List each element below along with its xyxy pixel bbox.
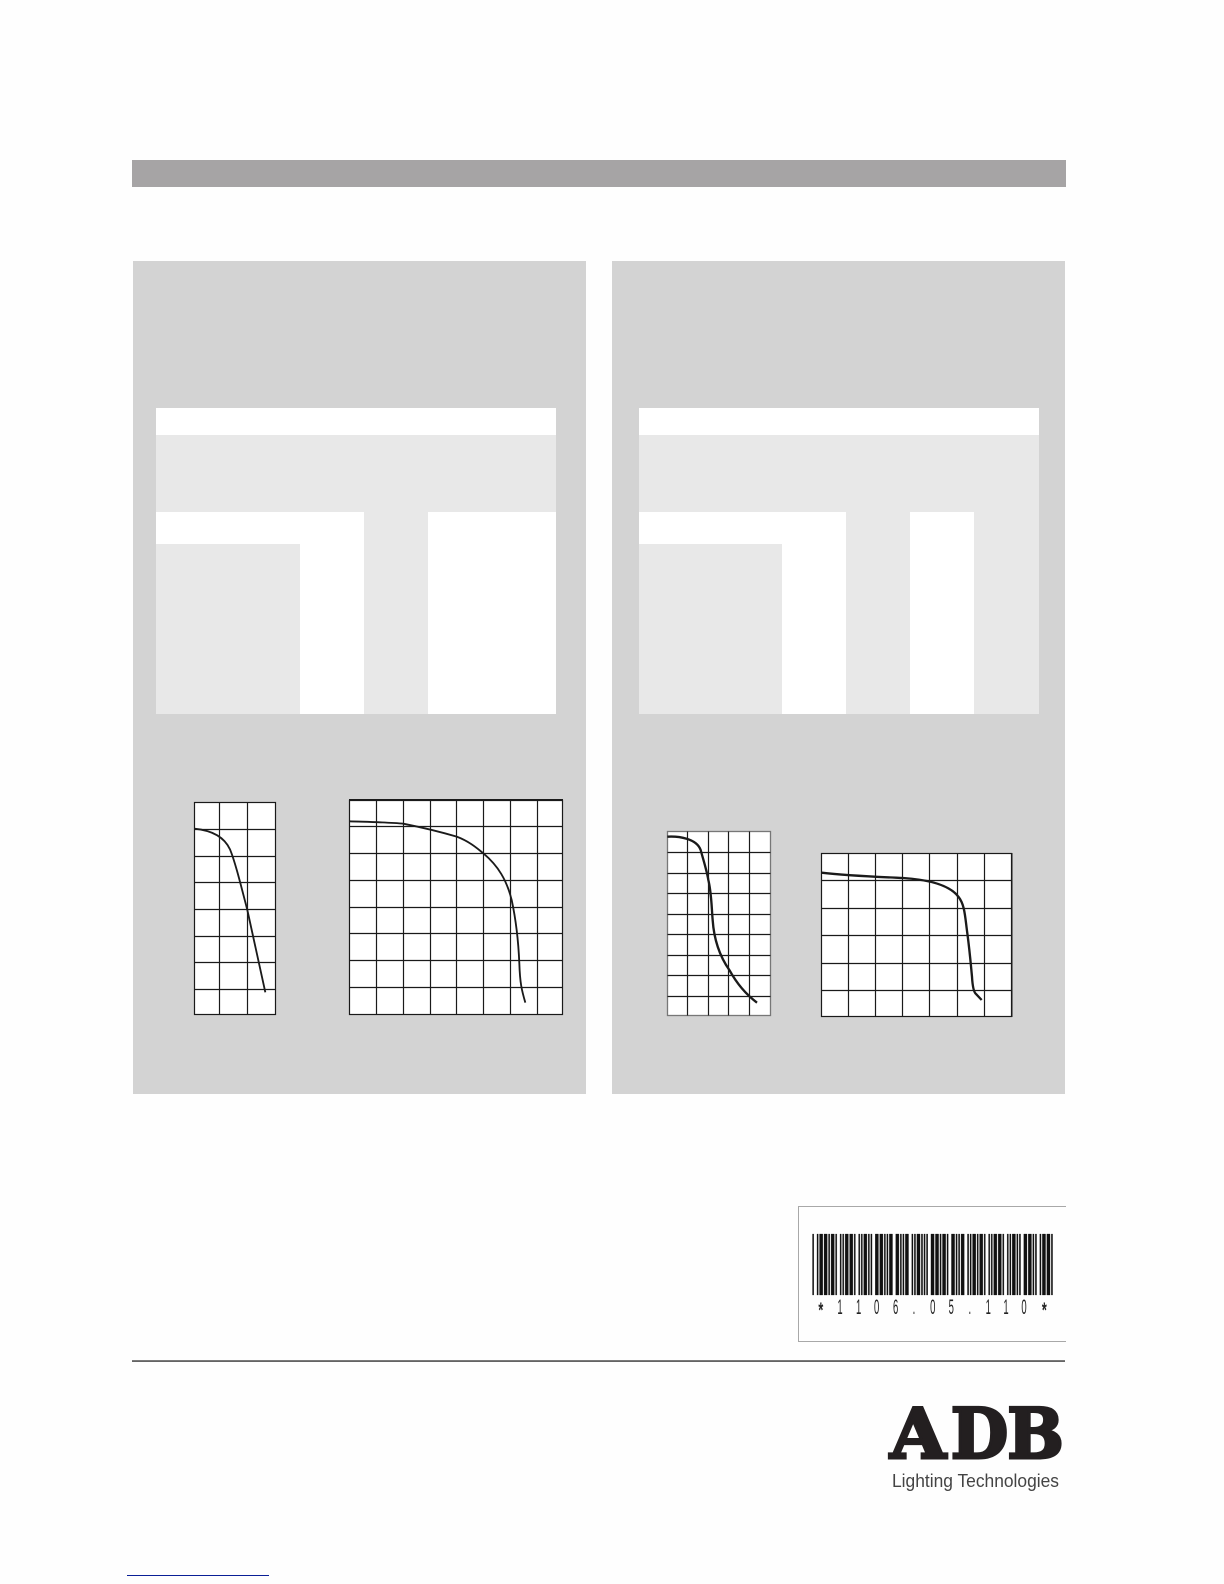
barcode bars bbox=[812, 1234, 1053, 1295]
chart: left narrow curve bbox=[194, 802, 276, 1014]
header bar bbox=[132, 160, 1066, 187]
logo tagline: Lighting Technologies bbox=[892, 1471, 1059, 1491]
chart: right narrow curve bbox=[667, 832, 770, 1016]
table: right bbox=[639, 408, 1039, 714]
chart: right wide curve bbox=[822, 853, 1012, 1017]
logo letter A: A bbox=[889, 1394, 947, 1475]
table: left bbox=[156, 408, 556, 714]
footer rule bbox=[132, 1360, 1065, 1362]
barcode number: 1106.05.110 bbox=[837, 1296, 1027, 1319]
panel: right bbox=[612, 261, 1065, 1094]
logo: ADB Lighting Technologies bbox=[889, 1393, 1064, 1491]
chart: left wide curve bbox=[349, 799, 563, 1014]
logo letter B: B bbox=[1007, 1394, 1064, 1475]
logo letter D: D bbox=[951, 1393, 1008, 1474]
barcode label bbox=[798, 1206, 1066, 1342]
panel: left bbox=[133, 261, 586, 1094]
blue underline at page bottom bbox=[127, 1575, 269, 1576]
barcode start and stop asterisks: ** bbox=[818, 1298, 1047, 1322]
